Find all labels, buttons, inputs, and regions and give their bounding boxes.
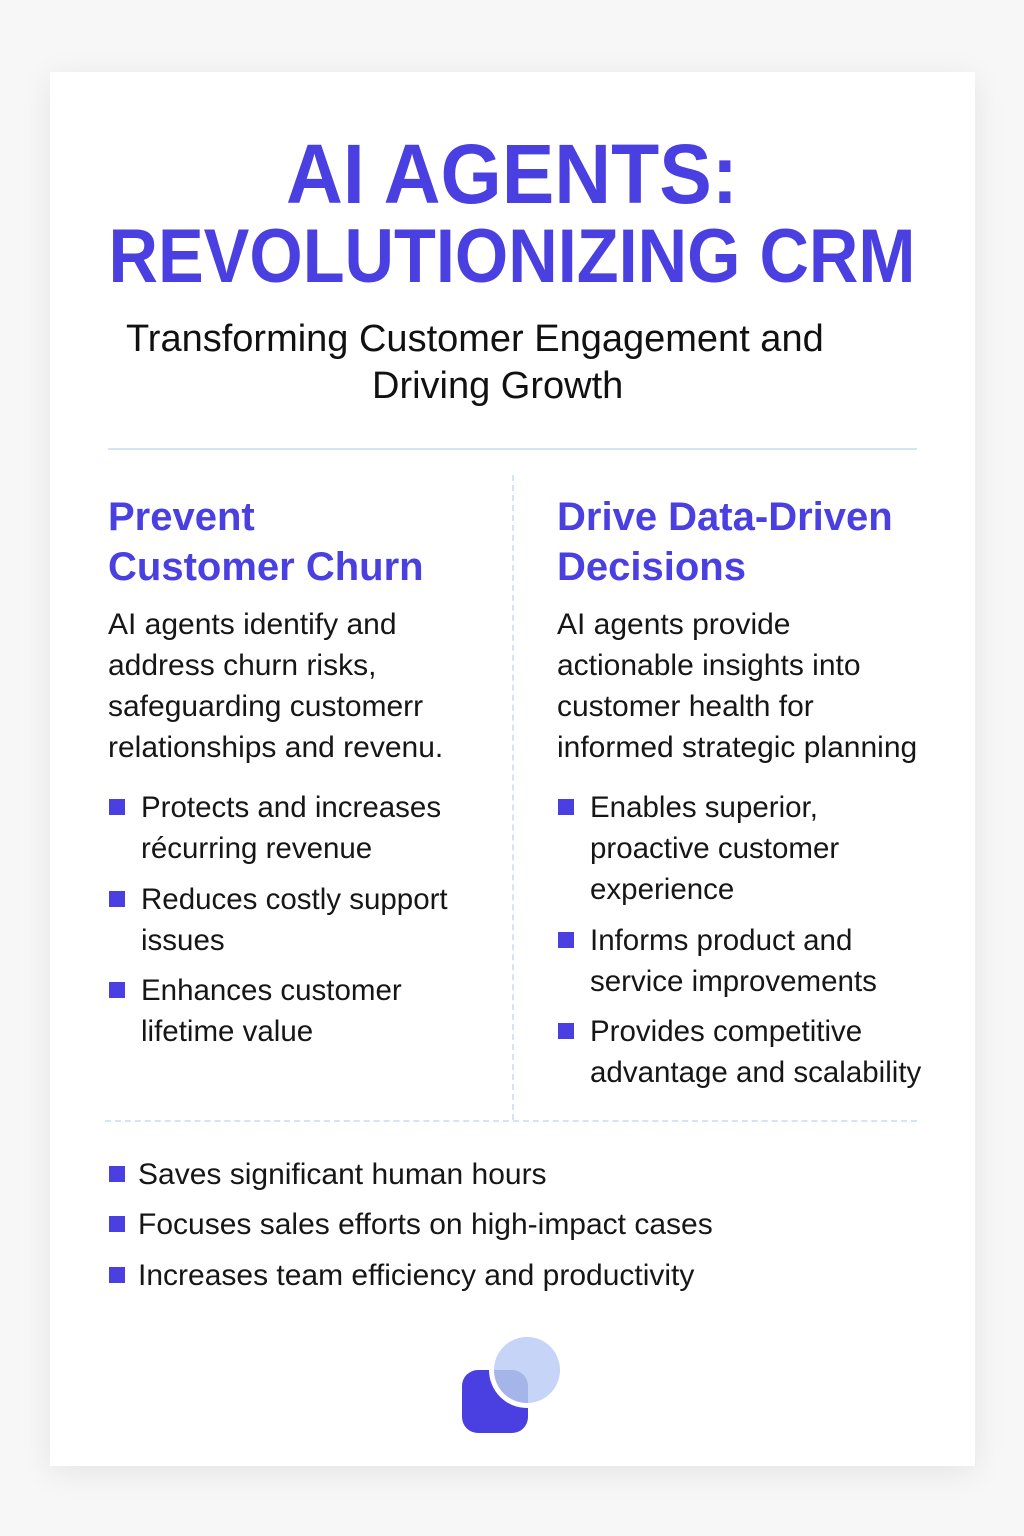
horizontal dashed divider <box>105 1120 917 1122</box>
bullet list: advantage and scalability <box>590 1056 921 1089</box>
title: AI AGENTS: <box>286 127 738 221</box>
heading: Customer Churn <box>108 545 424 589</box>
heading <box>557 495 893 589</box>
panel: prevent churn <box>108 495 448 1048</box>
bottom bullet list: Saves significant human hours <box>138 1158 547 1191</box>
bullet list: Enhances customer <box>141 974 402 1007</box>
subtitle <box>126 318 824 407</box>
description: informed strategic planning <box>557 731 917 764</box>
description: AI agents provide <box>557 608 790 641</box>
bullet list: Provides competitive <box>590 1015 862 1048</box>
description: actionable insights into <box>557 649 861 682</box>
heading <box>108 495 424 589</box>
bullet list: issues <box>141 924 225 957</box>
bottom bullet list: Increases team efficiency and productivity <box>138 1259 694 1292</box>
divider <box>108 448 917 450</box>
bottom bullet list <box>109 1158 713 1292</box>
heading: Prevent <box>108 495 255 539</box>
description: AI agents identify and <box>108 608 397 641</box>
bullet list: service improvements <box>590 965 877 998</box>
title <box>108 127 916 299</box>
bullet list: Enables superior, <box>590 791 818 824</box>
bullet list: proactive customer <box>590 832 839 865</box>
title: REVOLUTIONIZING CRM <box>108 214 916 299</box>
heading: Drive Data-Driven <box>557 495 893 539</box>
description <box>108 608 443 764</box>
bullet list: experience <box>590 873 734 906</box>
bullet list <box>558 791 922 1089</box>
description: customer health for <box>557 690 814 723</box>
subtitle: Transforming Customer Engagement and <box>126 318 824 360</box>
bottom bullet list: Focuses sales efforts on high-impact cases <box>138 1208 713 1241</box>
description: address churn risks, <box>108 649 376 682</box>
panel: data-driven decisions <box>557 495 922 1089</box>
description: safeguarding customerr <box>108 690 423 723</box>
subtitle: Driving Growth <box>372 365 623 407</box>
bullet list: lifetime value <box>141 1015 313 1048</box>
bullet list: Reduces costly support <box>141 883 448 916</box>
description: relationships and revenu. <box>108 731 443 764</box>
icon: logo <box>462 1337 560 1433</box>
bullet list: récurring revenue <box>141 832 372 865</box>
heading: Decisions <box>557 545 746 589</box>
bullet list: Protects and increases <box>141 791 441 824</box>
bullet list <box>109 791 448 1048</box>
description <box>557 608 917 764</box>
bullet list: Informs product and <box>590 924 852 957</box>
vertical dashed divider <box>512 475 514 1120</box>
